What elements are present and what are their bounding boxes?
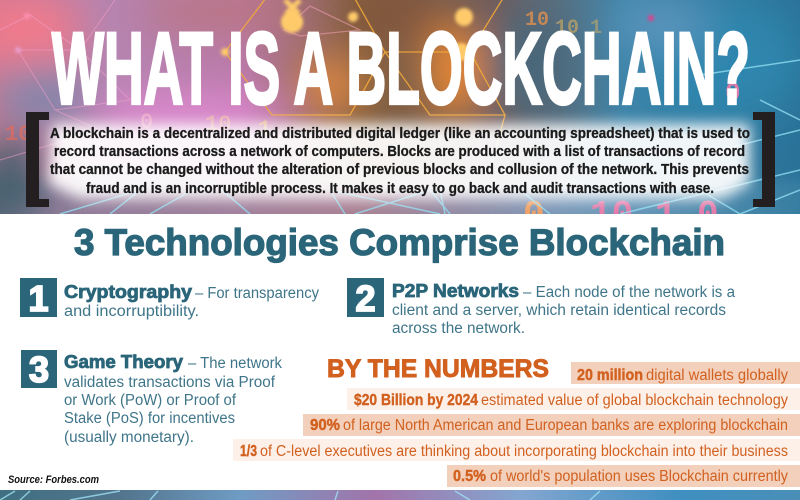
stat: global value: $20 Billion by 2024 [354,392,478,409]
item 3: game theory: (usually monetary). [64,429,194,446]
stat: global value: estimated value of global blockchain technology [481,392,788,409]
intro paragraph: fraud and is an incorruptible process. It makes it easy to go back and audit transactions with ease. [86,180,714,197]
item 3: game theory: validates transactions via Proof [64,374,276,391]
binary digits: 10 [205,112,231,137]
item 2: P2P networks: across the network. [392,320,525,337]
bottom image strip [0,490,800,500]
item 3: game theory: – The network [188,355,282,372]
item 2: P2P networks: – Each node of the network is a [523,284,735,301]
item 1: cryptography [20,278,319,320]
stat: global value [347,388,800,410]
stat: population: 0.5% [453,468,486,485]
binary digits: 1 [258,117,271,142]
binary digits: 0 [523,195,545,236]
binary digits [6,12,740,214]
hexagon network lines [225,0,505,170]
number badge 2: 2 [355,278,376,319]
number badge 3 [21,349,57,390]
item 1: cryptography: and incorruptibility. [64,303,199,320]
item 3: game theory: Game Theory [64,352,183,372]
item 3: game theory: Stake (PoS) for incentives [64,410,235,427]
right bracket [753,112,775,207]
number badge 3: 3 [29,349,49,390]
binary digits: 0 [140,110,153,135]
stat: executives: 1/3 [240,443,257,460]
item 3: game theory: or Work (PoW) or Proof of [64,392,237,409]
stat: banks: 90% [310,417,340,434]
icon: glowing nodes [15,8,654,61]
left bracket [26,112,49,207]
icon: hourglass shape [282,0,303,15]
binary digits: 0 [725,78,741,108]
background: tech network image [0,0,800,214]
stat: digital wallets: 20 million [577,367,643,384]
binary digits: 10 [5,122,31,147]
source credit: Source: Forbes.com [8,474,99,486]
heading: 3 technologies: 3 Technologies Comprise Blockchain [74,222,725,263]
item 2: P2P networks: P2P Networks [392,281,519,301]
circuit lines [60,60,800,214]
intro paragraph [50,125,750,197]
number badge 2 [347,278,384,319]
item 1: cryptography: – For transparency [195,285,319,302]
binary digits: 10 [590,195,633,236]
item 2: P2P networks: client and a server, which retain identical records [392,302,726,319]
heading: by the numbers: BY THE NUMBERS [327,355,549,383]
item 2: P2P networks [347,278,735,337]
binary digits: 10 [525,9,549,32]
number badge 1: 1 [28,278,49,319]
stat: population [447,465,800,487]
stat: digital wallets [571,362,800,384]
item 3: game theory [21,349,282,446]
binary digits: 1 [590,17,602,40]
item 1: cryptography: Cryptography [64,282,192,302]
binary digits: 10 [555,17,579,40]
binary digits: 1 [655,195,677,236]
number badge 1 [20,278,57,319]
stat: digital wallets: digital wallets globally [646,367,788,384]
paragraph glow panel [48,124,750,199]
binary digits: 0 [697,195,719,236]
